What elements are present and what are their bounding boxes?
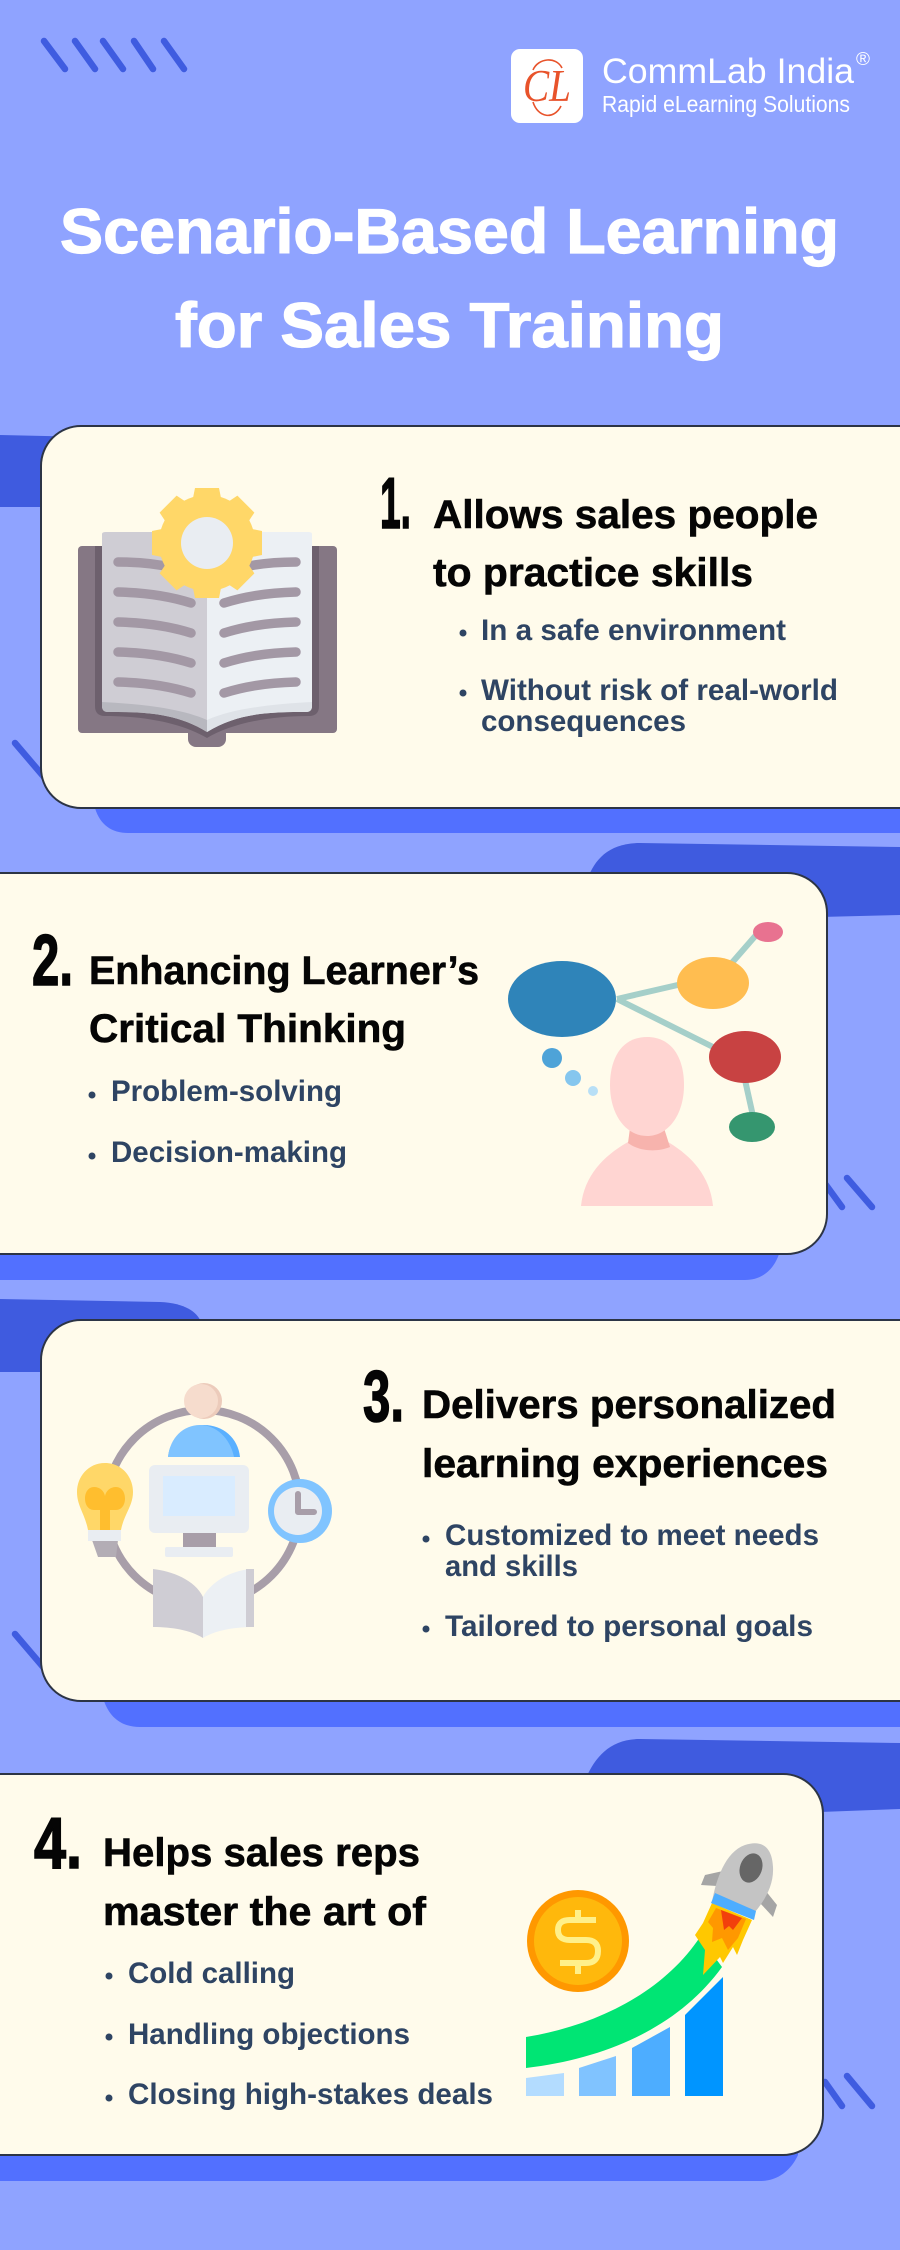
logo: CommLab India: ®: [856, 49, 870, 69]
text block: point 2: Critical Thinking: [89, 1007, 406, 1051]
text block: point 1: to practice skills: [433, 551, 753, 595]
text block: point 1: Without risk of real-world: [481, 674, 838, 707]
title: Scenario-Based Learning: [60, 197, 839, 267]
text block: point 4: Helps sales reps: [103, 1831, 420, 1875]
logo: CommLab India: CommLab India: [602, 52, 855, 91]
text block: point 1: In a safe environment: [481, 614, 786, 647]
icon: thinking head with mind map: [508, 922, 783, 1206]
icon: learner, computer, bulb, clock, book: [77, 1383, 332, 1638]
icon: open book with gear: [78, 488, 337, 747]
panel: 3 delivers personalized learning experiences: [0, 1299, 900, 1727]
panel: 2 enhancing learner's critical thinking: [0, 843, 900, 1280]
text block: point 3: [363, 1357, 836, 1643]
logo: CommLab India: Rapid eLearning Solutions: [602, 91, 850, 117]
text block: point 2: Problem-solving: [111, 1075, 342, 1108]
logo: CommLab India: [511, 49, 870, 123]
text block: point 4: Handling objections: [128, 2018, 410, 2051]
text block: point 3: Customized to meet needs: [445, 1519, 819, 1552]
text block: point 1: consequences: [481, 705, 686, 738]
text block: point 1: [380, 464, 838, 738]
text block: point 2: Decision-making: [111, 1136, 347, 1169]
text block: point 1: Allows sales people: [433, 493, 818, 537]
text block: point 2: 2.: [32, 921, 73, 1001]
title: for Sales Training: [175, 291, 724, 361]
text block: point 4: Closing high-stakes deals: [128, 2078, 493, 2111]
text block: point 2: Enhancing Learner’s: [89, 949, 479, 993]
text block: point 4: 4.: [34, 1804, 82, 1884]
text block: point 3: Tailored to personal goals: [445, 1610, 813, 1643]
logo: CommLab India: CL: [523, 60, 571, 111]
text block: point 4: [34, 1804, 493, 2111]
panel: 4 helps sales reps master the art of: [0, 1739, 900, 2181]
text block: point 3: 3.: [363, 1357, 404, 1437]
text block: point 3: learning experiences: [422, 1442, 828, 1486]
text block: point 1: 1.: [380, 464, 411, 544]
text block: point 2: [32, 921, 479, 1169]
text block: point 3: Delivers personalized: [422, 1383, 836, 1427]
panel: 1 allows sales people to practice skills: [0, 426, 900, 833]
text block: point 3: and skills: [445, 1550, 578, 1583]
icon: coin, growth chart and rocket: [526, 1843, 777, 2096]
title: [60, 197, 839, 361]
text block: point 4: Cold calling: [128, 1957, 295, 1990]
decorative slashes top left: [44, 41, 184, 69]
text block: point 4: master the art of: [103, 1890, 427, 1934]
